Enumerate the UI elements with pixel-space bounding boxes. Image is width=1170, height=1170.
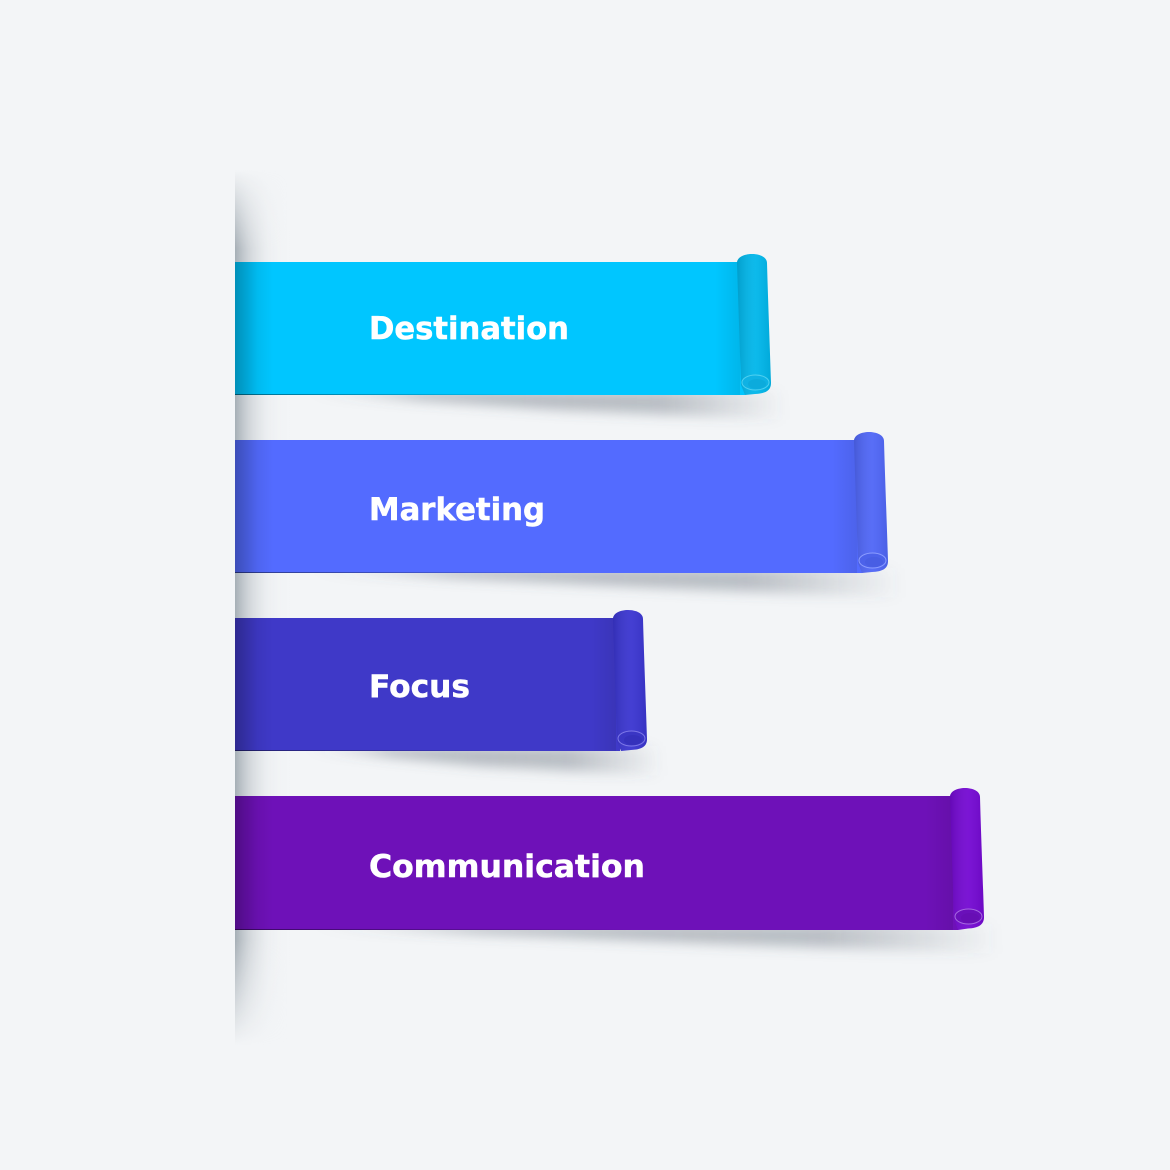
roll — [613, 610, 647, 751]
ribbon: Destination — [235, 254, 785, 420]
label: Marketing — [369, 492, 545, 528]
ribbon: Focus — [235, 610, 662, 776]
roll — [737, 254, 771, 395]
ribbon: Communication — [235, 788, 999, 954]
roll — [950, 788, 984, 930]
roll — [854, 432, 888, 573]
infographic — [235, 179, 984, 1034]
label: Destination — [369, 311, 569, 347]
label: Focus — [369, 669, 470, 705]
wall shadow — [235, 179, 266, 1034]
ribbon: Marketing — [235, 432, 902, 598]
label: Communication — [369, 849, 645, 885]
